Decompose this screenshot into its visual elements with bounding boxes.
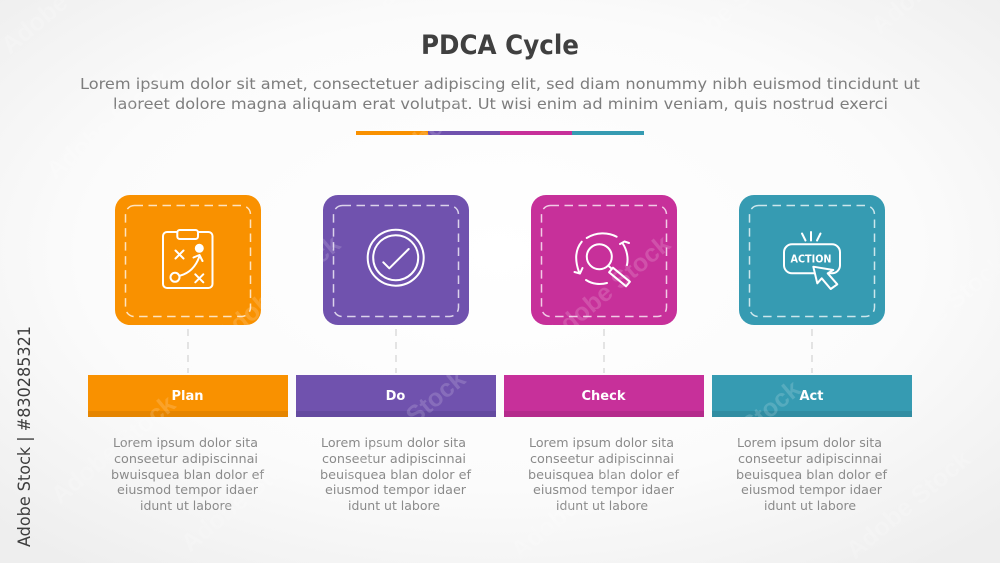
plan description: idunt ut labore: [140, 499, 232, 513]
stock watermark pattern: Adobe Stock: [371, 65, 506, 185]
stock watermark pattern: Adobe Stock: [841, 445, 976, 563]
panel: do: [296, 195, 496, 513]
subtitle text: laoreet dolore magna aliquam erat volutpat. Ut wisi enim ad minim veniam, quis nostrud exerci: [113, 95, 888, 113]
subtitle text: [80, 75, 920, 113]
act description: beuisquea blan dolor ef: [736, 468, 888, 482]
connector: [603, 329, 605, 373]
icon: action button with cursor: ACTION: [790, 254, 832, 266]
act description: idunt ut labore: [764, 499, 856, 513]
stock watermark pattern: Adobe Stock: [176, 438, 311, 558]
check dashed frame: [542, 206, 666, 316]
four-colour divider: [356, 131, 644, 135]
plan label bar: Plan: [171, 389, 204, 404]
stock watermark pattern: Adobe Stock: [46, 390, 181, 510]
act dashed frame: [750, 206, 874, 316]
stock watermark pattern: Adobe Stock: [41, 65, 176, 185]
act description: [736, 436, 888, 513]
check description: eiusmod tempor idaer: [533, 483, 674, 497]
act description: conseetur adipiscinnai: [738, 452, 882, 466]
panel: act: [712, 195, 912, 513]
act icon card: [739, 195, 885, 325]
stock id side text: Adobe Stock | #830285321: [15, 326, 35, 547]
stock watermark pattern: Adobe Stock: [336, 365, 471, 485]
check label bar: Check: [582, 389, 626, 404]
do description: Lorem ipsum dolor sita: [321, 436, 466, 450]
stock watermark pattern: Adobe Stock: [211, 230, 346, 350]
plan description: bwuisquea blan dolor ef: [111, 468, 265, 482]
check description: conseetur adipiscinnai: [530, 452, 674, 466]
do description: idunt ut labore: [348, 499, 440, 513]
plan description: [111, 436, 265, 513]
plan description: Lorem ipsum dolor sita: [113, 436, 258, 450]
check description: beuisquea blan dolor ef: [528, 468, 680, 482]
plan dashed frame: [126, 206, 250, 316]
connector: [395, 329, 397, 373]
check icon card: [531, 195, 677, 325]
act description: eiusmod tempor idaer: [741, 483, 882, 497]
do description: beuisquea blan dolor ef: [320, 468, 472, 482]
do dashed frame: [334, 206, 458, 316]
plan description: eiusmod tempor idaer: [117, 483, 258, 497]
check description: Lorem ipsum dolor sita: [529, 436, 674, 450]
icon: action button with cursor: [784, 232, 840, 289]
icon: clipboard strategy: [163, 230, 212, 288]
act label bar: [712, 375, 912, 417]
stock watermark pattern: Adobe Stock: [541, 230, 676, 350]
check description: idunt ut labore: [556, 499, 648, 513]
plan icon card: [115, 195, 261, 325]
panel: plan: [88, 195, 288, 513]
connector: [187, 329, 189, 373]
subtitle text: Lorem ipsum dolor sit amet, consectetuer adipiscing elit, sed diam nonummy nibh euismod tincidunt ut: [80, 75, 920, 93]
connector: [811, 329, 813, 373]
do description: [320, 436, 472, 513]
act description: Lorem ipsum dolor sita: [737, 436, 882, 450]
do description: conseetur adipiscinnai: [322, 452, 466, 466]
do description: eiusmod tempor idaer: [325, 483, 466, 497]
check label bar: [504, 375, 704, 417]
plan label bar: [88, 375, 288, 417]
panel: check: [504, 195, 704, 513]
do label bar: Do: [386, 389, 405, 404]
act label bar: Act: [800, 389, 823, 404]
stock watermark pattern: Adobe Stock: [701, 80, 836, 200]
check description: [528, 436, 680, 513]
title: PDCA Cycle: [421, 30, 579, 61]
icon: check circle: [368, 230, 424, 286]
stock watermark pattern: Adobe Stock: [506, 445, 641, 563]
icon: magnifier with cycle arrows: [574, 233, 630, 286]
plan description: conseetur adipiscinnai: [114, 452, 258, 466]
stock watermark pattern: Adobe Stock: [671, 375, 806, 495]
do label bar: [296, 375, 496, 417]
do icon card: [323, 195, 469, 325]
